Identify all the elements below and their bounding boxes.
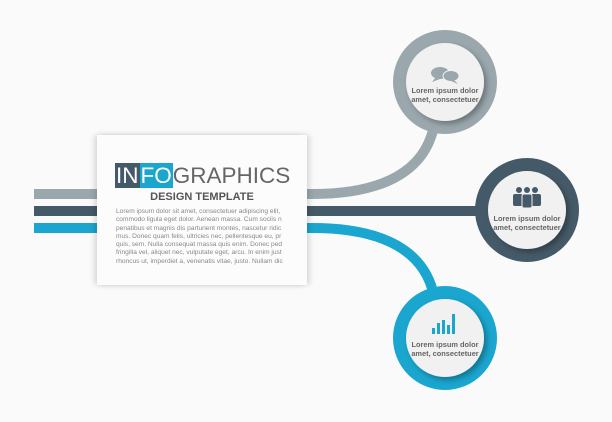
body text (116, 208, 283, 265)
circle texts: Lorem ipsum dolor (412, 86, 478, 95)
text: amet, consectetuer (411, 349, 479, 358)
circle: top (393, 30, 497, 134)
circle: bottom (393, 286, 497, 390)
panel: main card (97, 135, 307, 285)
text: amet, consectetuer (493, 223, 561, 232)
gray line (34, 126, 434, 194)
body text: mus. Donec quam felis, ultricies nec, pellentesque eu, pr (116, 233, 281, 240)
blue line (34, 228, 434, 296)
title: INFOGRAPHICS (116, 163, 290, 188)
text: Lorem ipsum dolor (412, 340, 478, 349)
body text: commodo ligula eget dolor. Aenean massa. Cum sociis n (116, 216, 282, 223)
text: Lorem ipsum dolor (494, 214, 560, 223)
body text: Lorem ipsum dolor sit amet, consectetuer adipiscing elit, (116, 208, 280, 215)
body text: fringilla vel, aliquet nec, vulputate eget, arcu. In enim just (116, 249, 282, 256)
body text: rhoncus ut, imperdiet a, venenatis vitae, justo. Nullam dic (116, 258, 283, 265)
circle texts (411, 86, 479, 104)
subtitle: DESIGN TEMPLATE (150, 191, 254, 203)
body text: quis, sem. Nulla consequat massa quis enim. Donec ped (116, 241, 282, 248)
circle: middle (475, 158, 579, 262)
body text: penatibus et magnis dis parturient montes, nascetur ridic (116, 225, 281, 232)
icon: bar chart (432, 314, 455, 334)
icon: people (513, 187, 541, 208)
icon: speech bubbles (431, 67, 459, 84)
circle texts: amet, consectetuer (411, 95, 479, 104)
dark line (34, 206, 480, 216)
